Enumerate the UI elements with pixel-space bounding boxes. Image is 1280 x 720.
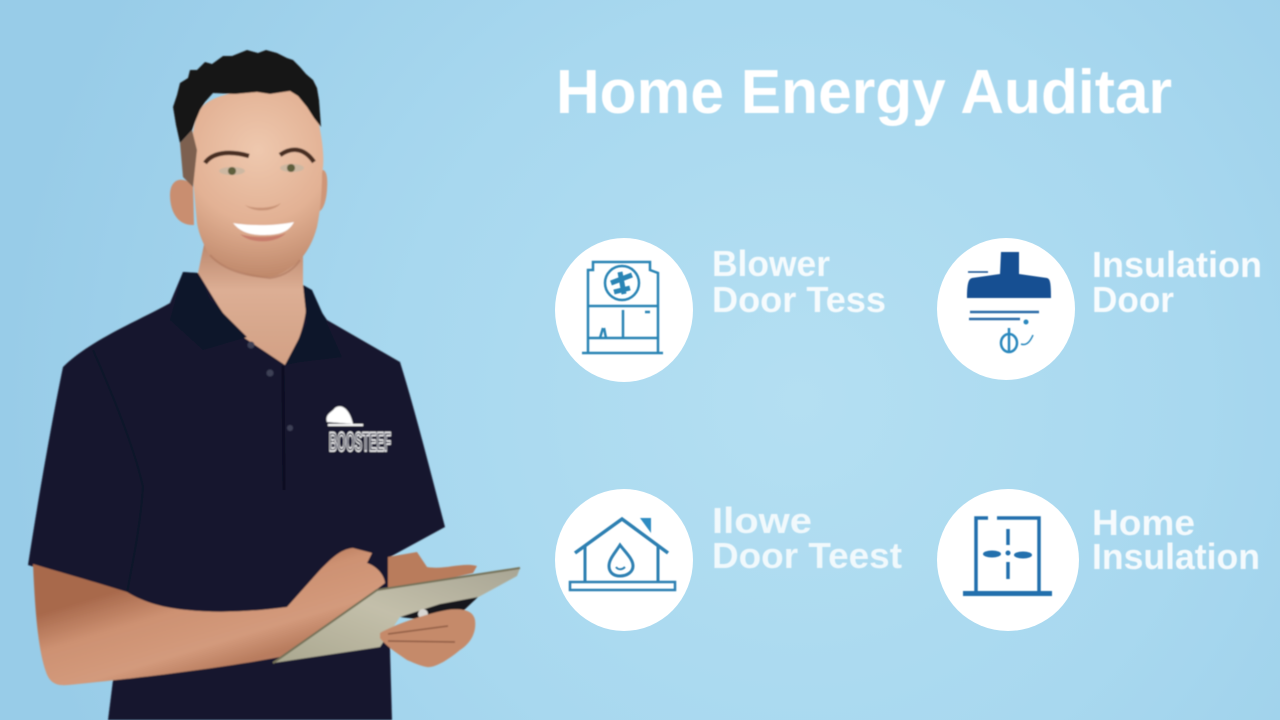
item: insulation door [937, 238, 1262, 380]
hair [173, 50, 321, 143]
person: energy auditor: BOOSTEEF [329, 427, 391, 457]
icon: house with drop [570, 518, 675, 590]
neck [198, 240, 307, 365]
jaw shadow [210, 255, 300, 278]
label: Door [1092, 279, 1174, 320]
left eyebrow [205, 153, 249, 163]
label [1092, 244, 1262, 320]
icon circle [555, 489, 693, 631]
label [712, 500, 902, 576]
left eye [219, 167, 245, 175]
icon: nozzle [967, 252, 1051, 352]
polo shirt [28, 272, 445, 720]
right eye [280, 164, 304, 172]
left ear [170, 180, 194, 225]
hair fade [180, 130, 197, 187]
clipboard [273, 568, 520, 663]
icon: door frame [963, 518, 1052, 596]
icon circle [937, 238, 1075, 380]
shirt logo [327, 406, 391, 457]
icon: blower door [582, 262, 663, 353]
face [191, 90, 323, 277]
lower hand [380, 609, 475, 667]
item: home insulation [937, 489, 1260, 631]
label: Insulation [1092, 536, 1260, 577]
label: Ilowe [712, 500, 812, 541]
label [712, 243, 886, 320]
left arm and writing hand [33, 548, 385, 685]
label: Door Teest [712, 535, 902, 576]
left collar [170, 272, 247, 350]
shirt buttons [248, 342, 293, 431]
icon circle [555, 238, 693, 382]
finger creases [388, 626, 455, 642]
label [1092, 502, 1260, 577]
right collar [285, 285, 342, 365]
sleeve seam [93, 350, 143, 593]
title: Home Energy Auditar [556, 58, 1172, 127]
mouth [233, 222, 294, 235]
label: Blower [712, 243, 830, 284]
item: blower door test [555, 238, 886, 382]
right eyebrow [280, 150, 314, 162]
right ear [317, 170, 327, 212]
device held under board [400, 597, 478, 620]
clipboard top edge [273, 568, 520, 663]
lower lip [240, 233, 286, 241]
label: Door Tess [712, 279, 886, 320]
icon circle [937, 489, 1079, 631]
right forearm behind board [388, 552, 477, 590]
person: energy auditor [28, 50, 520, 720]
pen cap [418, 609, 428, 619]
nose [245, 203, 281, 210]
label: Insulation [1092, 244, 1262, 285]
label: Home [1092, 502, 1195, 543]
placket [283, 366, 284, 490]
item: home door test [555, 489, 902, 631]
